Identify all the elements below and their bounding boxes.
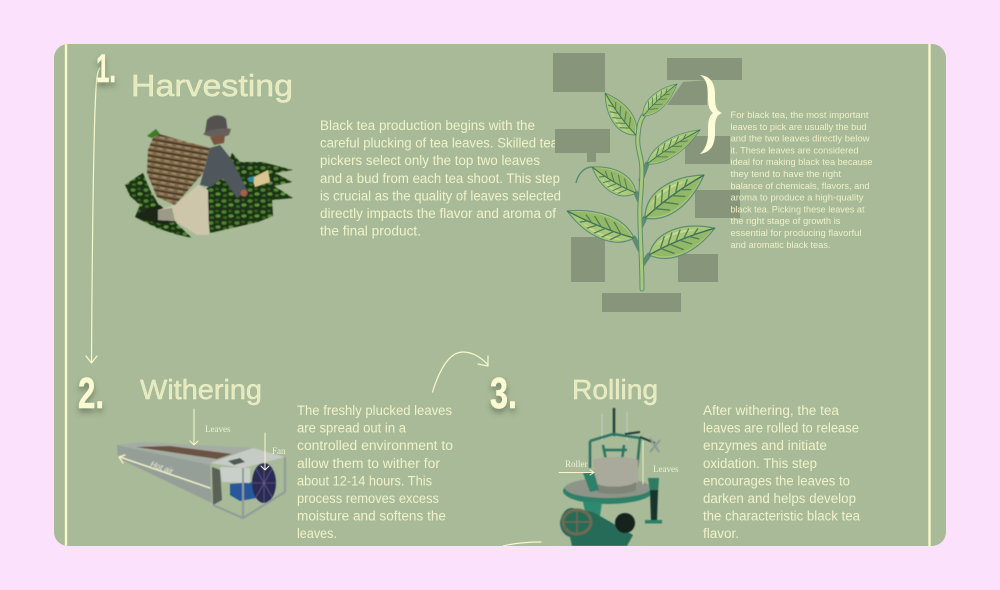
table surface	[565, 478, 651, 498]
leaf 3	[646, 129, 701, 165]
text: rolling description: flavor.	[703, 526, 739, 541]
tray top	[210, 448, 285, 468]
drum lower	[597, 482, 636, 494]
text: best leaves note: balance of chemicals, flavors, and	[730, 181, 870, 191]
text: best leaves note: ideal for making black tea because	[730, 157, 872, 167]
curly brace	[700, 75, 722, 154]
trough far wall	[117, 442, 253, 465]
leaf 2	[642, 84, 678, 116]
card	[252, 170, 270, 187]
number 3: 3.	[490, 369, 517, 418]
leaf 6	[562, 201, 638, 250]
basket leaves	[147, 129, 160, 138]
drum	[593, 457, 638, 487]
text: harvesting description: careful plucking of tea leaves. Skilled tea	[320, 136, 558, 151]
text: harvesting description: and a bud from each tea shoot. This step	[320, 171, 560, 186]
wheel spokes	[563, 510, 591, 534]
photo: tea picker with basket	[125, 115, 293, 238]
blue glove	[248, 176, 254, 182]
ground shadow	[135, 205, 178, 224]
heading: Rolling: Rolling	[572, 374, 658, 405]
basket	[147, 133, 210, 205]
right border line	[928, 44, 931, 546]
arrow: continuation to next step	[503, 542, 541, 546]
leaves label: Leaves	[653, 464, 679, 474]
label box: right middle	[695, 190, 740, 218]
table rim	[563, 478, 653, 504]
face	[210, 135, 225, 145]
diagram: rolling machine	[560, 408, 662, 546]
label box: bud	[667, 80, 707, 105]
hot air label: Hot air	[149, 459, 175, 476]
panel background	[54, 44, 946, 546]
panel: process steps	[54, 44, 946, 546]
upper green frame	[590, 434, 640, 468]
text: withering description: controlled environment to	[297, 438, 453, 453]
leaf 5	[636, 163, 711, 228]
text: withering description: allow them to wither for	[297, 456, 441, 471]
text: best leaves note: they tend to have the right	[730, 169, 841, 179]
trouser shade	[158, 208, 175, 221]
spindle	[613, 408, 615, 436]
hand	[240, 190, 248, 196]
text: withering description	[297, 403, 453, 541]
arrow: step 1 to step 2	[86, 68, 100, 363]
text: rolling description: oxidation. This step	[703, 456, 817, 471]
center column	[583, 502, 602, 516]
right foot	[645, 520, 662, 524]
tea bushes right	[205, 153, 293, 233]
tray dark detail	[228, 458, 245, 465]
fan spokes	[252, 463, 276, 503]
number 2: 2.	[78, 369, 104, 418]
belt guard and base	[560, 508, 633, 546]
text: harvesting description: is crucial as the quality of leaves selected	[320, 188, 561, 203]
frame	[213, 457, 285, 518]
dark interior	[212, 467, 222, 505]
blue fan housing	[230, 482, 256, 501]
text: rolling description: enzymes and initiate	[703, 438, 827, 453]
label box: left upper	[555, 129, 610, 162]
label box: right upper	[685, 136, 730, 164]
text: rolling description: leaves are rolled to release	[703, 421, 859, 436]
label box: left lower	[571, 237, 605, 282]
roller arrow	[559, 470, 594, 475]
text: best leaves note: For black tea, the most important	[730, 110, 869, 120]
hat brim	[203, 129, 231, 137]
diagram: withering trough	[117, 442, 285, 518]
text: best leaves note: aroma to produce a high-quality	[730, 193, 864, 203]
text: best leaves note: and the two leaves directly below	[730, 134, 870, 144]
text: best leaves note: it. These leaves are considered	[730, 145, 858, 155]
tea bushes left	[125, 173, 192, 238]
leaf 7	[644, 215, 719, 266]
label box: bottom	[602, 293, 681, 312]
trousers	[158, 185, 209, 235]
rods	[602, 412, 627, 440]
number 1: 1.	[96, 47, 116, 91]
text: rolling description: the characteristic black tea	[703, 509, 860, 524]
text: best leaves note: leaves to pick are usually the bud	[730, 122, 866, 132]
text: harvesting description: directly impacts the flavor and aroma of	[320, 206, 556, 221]
label box: right lower	[678, 254, 718, 282]
left arm	[583, 472, 599, 492]
text: withering description: moisture and softens the	[297, 509, 446, 524]
diagram: tea plant with hidden labels	[553, 53, 742, 312]
text: harvesting description: the final product.	[320, 224, 421, 239]
text: withering description: process removes excess	[297, 491, 439, 506]
text: withering description: leaves.	[297, 526, 337, 541]
motor	[615, 513, 635, 533]
text: best leaves note: essential for producing flavorful	[730, 228, 862, 238]
infographic: black tea production	[54, 44, 946, 546]
text: best leaves note	[730, 110, 872, 250]
plant stem	[634, 115, 649, 289]
wheel	[563, 510, 591, 534]
fan arrow	[261, 433, 269, 470]
arrow: step 2 to step 3	[432, 352, 488, 392]
text: best leaves note: black tea. Picking these leaves at	[730, 204, 865, 214]
trough side	[117, 445, 212, 503]
hat crown	[205, 115, 228, 133]
text: harvesting description	[320, 118, 561, 239]
torso and arm	[200, 145, 247, 198]
leaves label: Leaves	[205, 424, 231, 434]
text: rolling description: encourages the leaves to	[703, 473, 850, 488]
label box: top right	[667, 58, 742, 80]
text: best leaves note: the right stage of growth is	[730, 216, 841, 226]
fan	[252, 463, 276, 503]
leaves pointer	[642, 441, 644, 484]
right support	[650, 490, 658, 520]
text: rolling description	[703, 403, 860, 541]
text: withering description: The freshly plucked leaves	[297, 403, 452, 418]
text: withering description: about 12-14 hours. This	[297, 473, 432, 488]
text: rolling description: After withering, the tea	[703, 403, 839, 418]
roller label: Roller	[565, 459, 588, 469]
left border line	[65, 44, 67, 546]
hot air arrow	[119, 455, 210, 488]
tray box	[220, 467, 250, 483]
label box: top left	[553, 53, 605, 92]
heading: Withering: Withering	[140, 374, 262, 405]
leaf 4	[575, 166, 636, 196]
text: harvesting description: pickers select only the top two leaves	[320, 153, 540, 168]
leaf 1	[604, 92, 638, 136]
dark linkage	[625, 432, 655, 443]
text: harvesting description: Black tea production begins with the	[320, 118, 535, 133]
right support top	[648, 478, 659, 492]
withering bed	[136, 446, 232, 459]
leaves arrow	[190, 409, 198, 445]
text: best leaves note: and aromatic black teas.	[730, 240, 830, 250]
text: rolling description: darken and helps develop	[703, 491, 856, 506]
heading: Harvesting: Harvesting	[131, 68, 293, 103]
fan label: Fan	[272, 446, 286, 456]
plant stem highlight	[638, 115, 644, 289]
lever	[650, 438, 660, 452]
text: withering description: are spread out in a	[297, 421, 406, 436]
